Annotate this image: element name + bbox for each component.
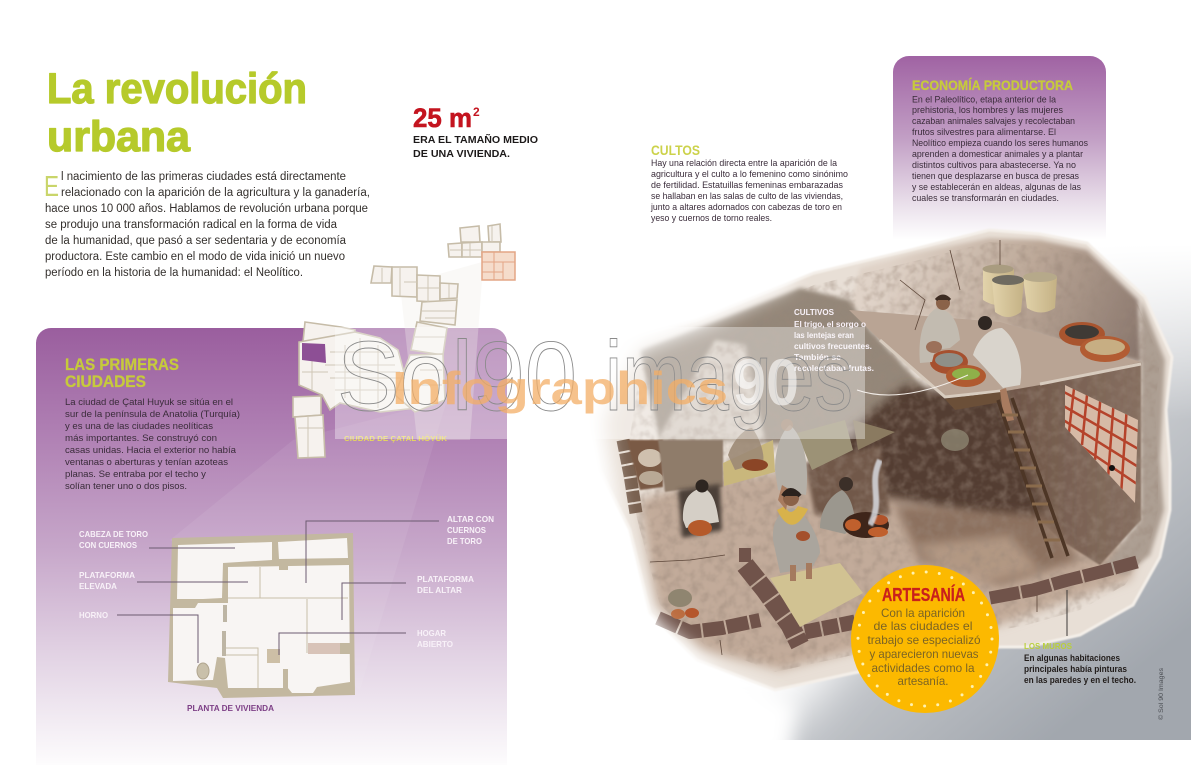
title: La revolución [47,65,307,113]
plan labels: DE TORO [447,536,482,546]
plan labels: ABIERTO [417,639,453,649]
scene rim [586,230,1172,690]
niche and column [627,440,723,538]
plan labels: CON CUERNOS [79,540,137,550]
plan labels: PLATAFORMA [417,574,474,584]
callout: artesanía [851,565,999,713]
watermark: 90 [733,345,799,419]
text block: intro: de la humanidad, que pasó a ser sedentaria y de economía [45,235,347,247]
stone texture [626,242,1159,672]
woven mat [770,563,863,627]
leader line: los muros [1066,590,1068,636]
upper-level back wall [849,238,1141,362]
city map: Çatal Höyük [293,224,515,458]
person: kneeling at the back [728,428,763,470]
callout: artesanía: actividades como la [872,661,975,675]
panel: economía productora [893,56,1106,240]
plan caption: PLANTA DE VIVIENDA [187,703,274,713]
dark interior [830,385,1050,530]
left upper wall [640,288,935,445]
title: urbana [47,113,191,161]
highlighted house, orange [482,252,515,280]
bowl at the back [742,459,768,471]
fire [843,460,889,538]
text block: cultos: se hallaban en las salas de culto de las viviendas, [651,191,843,202]
plan labels: CABEZA DE TORO [79,529,148,539]
callout: artesanía: Con la aparición [881,606,965,620]
caption: cultivos: El trigo, el sorgo o [794,319,866,329]
plan labels [79,514,494,649]
city map caption: CIUDAD DE ÇATAL HÖYÜK [344,434,447,443]
text block: intro: hace unos 10 000 años. Hablamos de revolución urbana porque [45,203,368,215]
floor plan: planta de vivienda [168,533,355,698]
caption: cultivos: CULTIVOS [794,307,834,317]
caption: cultivos: las lentejas eran [794,330,854,340]
floor cracks [650,240,1037,655]
callout: artesanía: artesanía. [898,674,948,688]
caption: cultivos: cultivos frecuentes. [794,341,872,351]
text block: cultos [650,143,848,224]
text block: economía: y se establecerán en aldeas, algunas de las [912,182,1081,193]
credit: © Sol 90 Images [1158,668,1165,720]
text block: intro: l nacimiento de las primeras ciudades está directamente [61,171,346,183]
text block: cultos: junto a altares adornados con cabezas de toro en [650,202,842,213]
watermark: Infographics [392,362,728,414]
text block: economía: tienen que desplazarse en busca de presas [912,171,1079,182]
title [47,65,307,161]
text block: economía: cazaban animales salvajes y recolectaban [912,116,1075,127]
text block: Çatal Huyuk: y es una de las ciudades neolíticas [65,421,213,432]
plan labels: PLATAFORMA [79,570,135,580]
text block: Çatal Huyuk: sur de la península de Anatolia (Turquía) [65,409,240,420]
text block: Çatal Huyuk: La ciudad de Çatal Huyuk se sitúa en el [65,397,233,408]
text block: Çatal Huyuk: ventanas o aberturas y tenían azoteas [65,457,228,468]
text block: economía: frutos silvestres para alimentarse. El [912,127,1056,138]
grey shadow behind scene [784,278,1191,740]
back wall, centre [805,445,890,515]
person: at the door [683,480,719,536]
text block: economía: Neolítico empieza cuando los seres humanos [912,138,1088,149]
heading: las primeras ciudades: CIUDADES [65,372,146,391]
light beam [400,262,482,440]
caption: los muros: En algunas habitaciones [1024,653,1120,663]
wall painting [1065,385,1138,503]
text block: Çatal Huyuk [65,397,240,492]
text block: economía: En el Paleolítico, etapa anterior de la [912,94,1057,106]
text block: economía: prehistoria, los hombres y las mujeres [912,105,1063,116]
text block: cultos: CULTOS [651,143,700,158]
plan labels: CUERNOS [447,525,486,535]
leader line: cultivos [857,375,968,395]
caption: los muros: LOS MUROS [1024,641,1072,651]
text block: cultos: yeso y cuernos de torno reales. [651,213,772,224]
grinding stones [668,589,699,619]
callout: artesanía: de las ciudades el [874,619,972,633]
text block: economía: cuales se transformarán en ciudades. [912,193,1059,204]
lower right wall [930,362,1141,565]
callout: 25 m2: 2 [473,105,480,119]
text block: Çatal Huyuk: más importantes. Se construyó con [65,433,217,444]
person: kneading in the foreground [773,485,820,581]
watermark [335,321,865,439]
caption: los muros: en las paredes y en el techo. [1024,675,1136,685]
text block: economía: distintos cultivos para abastecerse. Ya no [912,160,1076,171]
illustration: neolithic dwelling [560,230,1172,760]
callout: artesanía: trabajo se especializó [868,633,981,647]
plan labels: ALTAR CON [447,514,494,524]
text block: economía: aprenden a domesticar animales y a plantar [912,149,1083,160]
watermark: images [605,321,853,431]
drop cap: E [44,171,59,203]
person: tending the fire [820,477,855,534]
text block: cultos: de fertilidad. Estatuillas femeninas embarazadas [651,180,843,191]
baskets [982,264,1057,317]
callout: artesanía: y aparecieron nuevas [870,647,978,661]
heading: las primeras ciudades [65,355,179,391]
plan labels: HORNO [79,610,108,620]
heading: economía productora: ECONOMÍA PRODUCTORA [912,77,1073,93]
stone wall, left [623,440,636,513]
caption: cultivos: recolectaban frutas. [794,363,874,373]
floor base [640,470,1140,670]
text block: cultos: Hay una relación directa entre la aparición de la [651,158,838,169]
caption: los muros [1024,641,1136,685]
plan labels: HOGAR [417,628,446,638]
plan labels: DEL ALTAR [417,585,462,595]
watermark: Sol90 [337,321,577,431]
leader lines [117,521,439,663]
text block: intro: relacionado con la aparición de la agricultura y la ganadería, [61,187,370,199]
highlighted room, purple [302,343,326,363]
text block: economía [912,94,1088,204]
animal skull on the wall [941,429,969,451]
text block: intro: período en la historia de la humanidad: el Neolítico. [45,267,303,279]
caption: los muros: principales había pinturas [1024,664,1127,674]
upper platform [849,310,1141,398]
text block: intro [44,171,370,279]
callout: 25 m2 [413,103,538,160]
caption: cultivos [794,307,874,373]
callout: 25 m2: DE UNA VIVIENDA. [413,148,510,160]
plan labels: ELEVADA [79,581,117,591]
bowls [930,322,1130,387]
callout: 25 m2: ERA EL TAMAÑO MEDIO [413,133,538,146]
person: standing at the back [775,419,807,495]
right stone rim [1100,300,1165,575]
person: kneeling, back view [973,316,1021,422]
fade of the scene towards the page [560,250,800,760]
stone curbs [658,548,1137,645]
callout: artesanía: ARTESANÍA [882,584,965,605]
ladder [998,398,1068,558]
heading: las primeras ciudades: LAS PRIMERAS [65,355,179,374]
person: seated on the platform [920,296,960,363]
light beams from map to plan [170,400,447,690]
caption: cultivos: También se [794,352,841,362]
text block: intro: productora. Este cambio en el modo de vida inició un nuevo [45,251,345,263]
text block: intro: se produjo una transformación radical en la forma de vida [45,219,338,231]
inner walls [298,226,492,457]
dotted ring [858,572,992,706]
text block: Çatal Huyuk: casas unidas. Hacia el exterior no había [65,445,237,456]
text block: cultos: agricultura y el culto a lo femenino como sinónimo [651,169,848,180]
callout: 25 m2: 25 m [413,103,472,133]
panel: las primeras ciudades [36,328,507,765]
text block: Çatal Huyuk: solían tener uno o dos pisos. [65,481,187,492]
text block: Çatal Huyuk: planas. Se entraba por el techo y [65,469,206,480]
mats [723,420,895,486]
